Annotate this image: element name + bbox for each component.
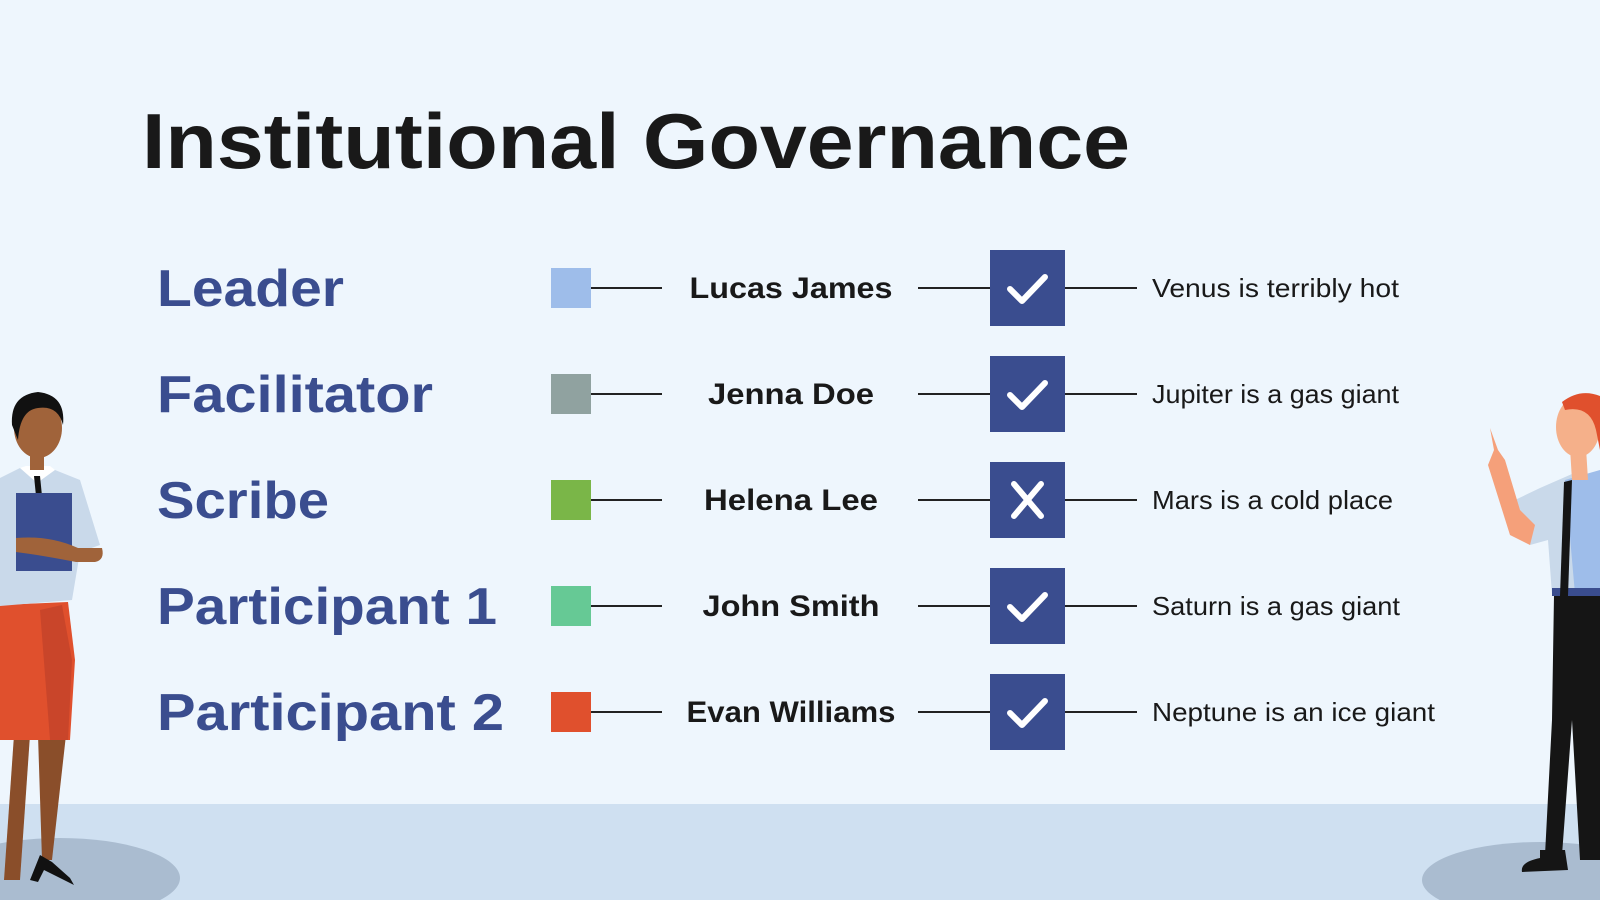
row: leader <box>157 250 1400 326</box>
row: facilitator <box>157 356 1400 432</box>
row: facilitator: Jupiter is a gas giant <box>1152 379 1400 409</box>
row: participant 2: Neptune is an ice giant <box>1152 697 1436 727</box>
row: scribe: Scribe <box>157 472 329 530</box>
row: participant 2: Participant 2 <box>157 684 504 742</box>
row: facilitator: Facilitator <box>157 366 433 424</box>
row: participant 1: John Smith <box>702 590 880 623</box>
row: scribe <box>157 462 1393 538</box>
row: leader: Venus is terribly hot <box>1152 273 1400 303</box>
row: scribe: Helena Lee <box>704 484 878 517</box>
row: facilitator: Jenna Doe <box>708 378 874 411</box>
row: scribe: Mars is a cold place <box>1152 485 1393 515</box>
title: Institutional Governance <box>142 97 1130 185</box>
row: participant 2: Evan Williams <box>686 696 896 729</box>
row: participant 1: Saturn is a gas giant <box>1152 591 1401 621</box>
row: participant 1: Participant 1 <box>157 578 497 636</box>
row: participant 1 <box>157 568 1401 644</box>
icon: woman with folder <box>0 392 180 900</box>
icon: man pointing <box>1422 393 1600 900</box>
row: participant 2 <box>157 674 1436 750</box>
floor <box>0 804 1600 900</box>
row: leader: Leader <box>157 260 344 318</box>
row: leader: Lucas James <box>690 272 892 305</box>
